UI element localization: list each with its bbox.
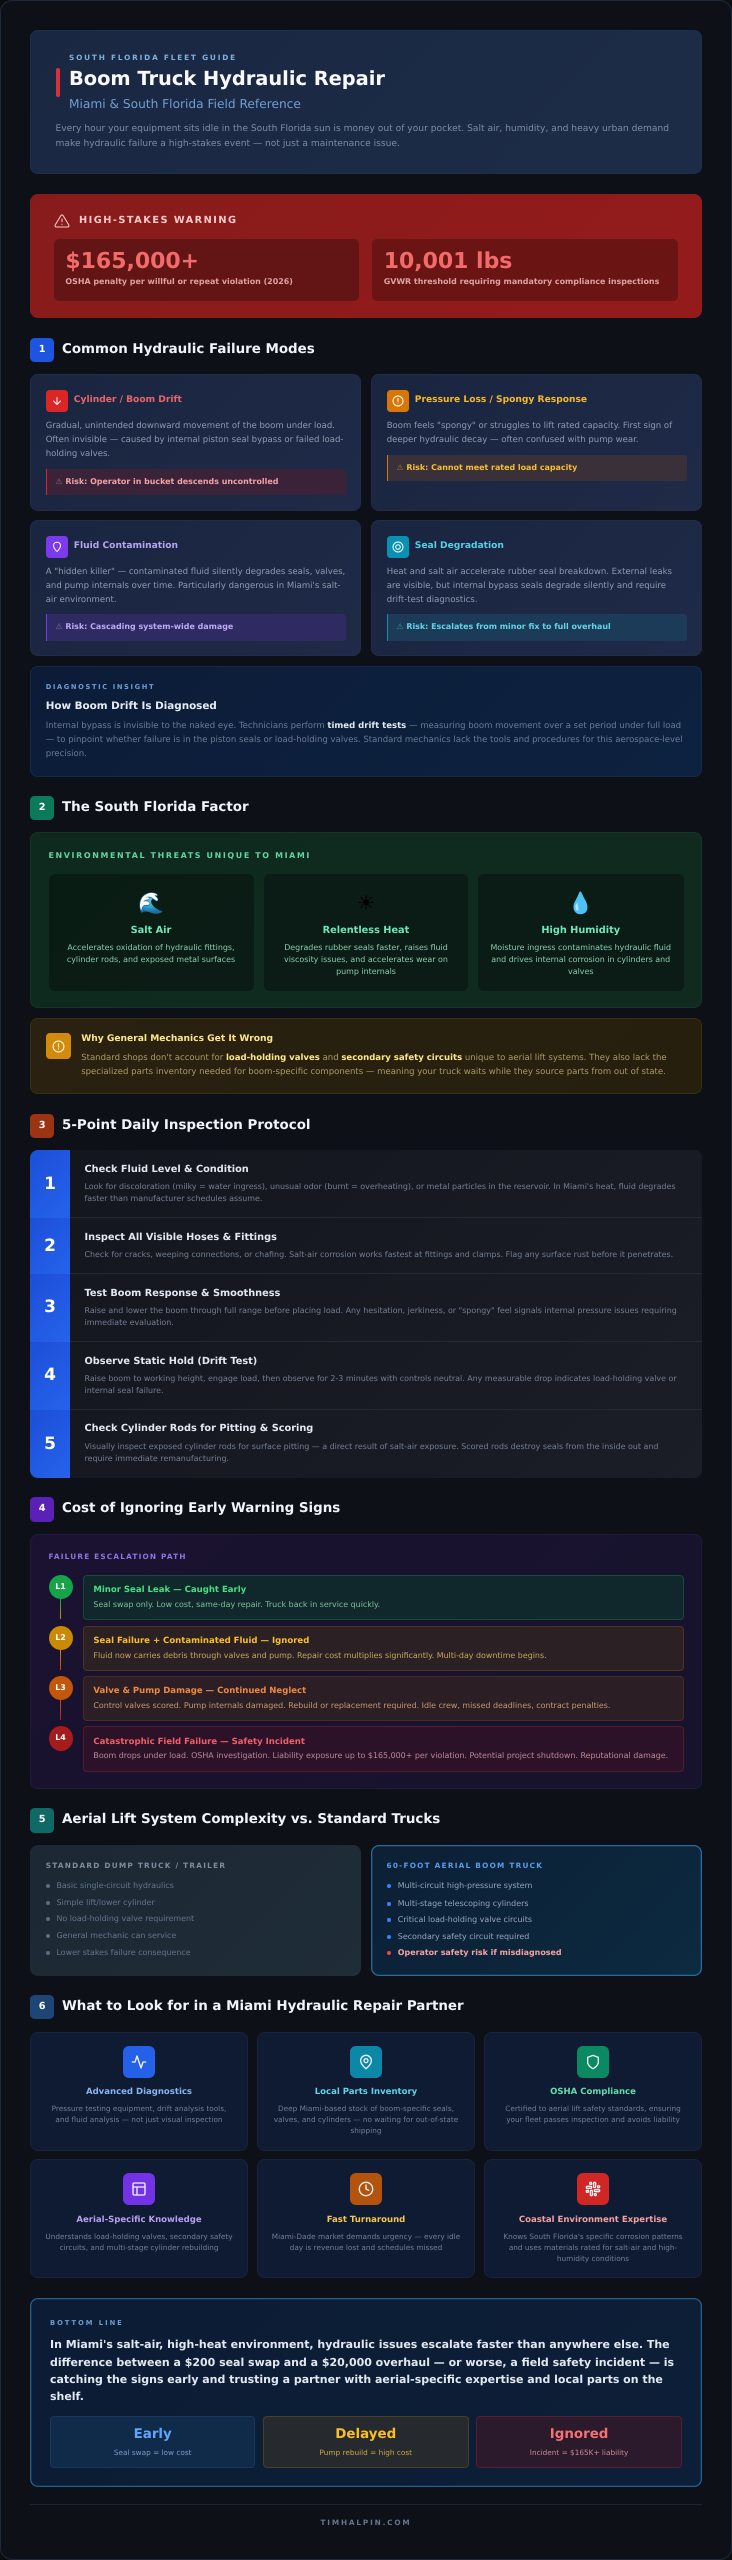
icon: slack xyxy=(577,2173,609,2205)
stat caption: OSHA penalty per willful or repeat violation (2026) xyxy=(65,277,293,286)
summary text: shelf. xyxy=(50,2390,84,2403)
card text: Gradual, unintended downward movement of the boom under load. xyxy=(46,421,335,431)
heading: section 1 xyxy=(30,338,315,362)
step 1 xyxy=(30,1150,702,1218)
card text: valves, and cylinders — no waiting for out-of-state xyxy=(274,2115,458,2124)
card title: Coastal Environment Expertise xyxy=(519,2214,667,2224)
card: advanced diagnostics xyxy=(30,2032,248,2151)
stat: GVWR threshold xyxy=(372,239,678,301)
icon: droplet xyxy=(46,536,68,558)
threat text xyxy=(67,943,235,964)
level text: Fluid now carries debris through valves and pump. Repair cost multiplies significantly. Multi-day downtime begins. xyxy=(93,1651,547,1660)
callout title: Why General Mechanics Get It Wrong xyxy=(81,1034,273,1044)
step text: Raise and lower the boom through full range before placing load. Any hesitation, jerkiness, or "spongy" feel signals internal pressure issues requiring xyxy=(84,1306,677,1315)
card text: holding valves. xyxy=(46,449,110,459)
threat text: Accelerates oxidation of hydraulic fittings, xyxy=(67,943,235,952)
number xyxy=(30,1218,70,1274)
threat title: Salt Air xyxy=(131,925,171,936)
kicker: SOUTH FLORIDA FLEET GUIDE xyxy=(69,53,237,62)
badge: 5 xyxy=(39,1814,46,1825)
card text xyxy=(484,2231,702,2264)
marker xyxy=(48,1726,72,1751)
card title: Seal Degradation xyxy=(415,541,504,551)
risk callout: ⚠ Risk: Operator in bucket descends uncontrolled xyxy=(55,477,278,486)
card text xyxy=(30,2231,248,2253)
number: 1 xyxy=(44,1174,56,1194)
step text: require immediate remanufacturing. xyxy=(84,1454,229,1463)
icon: layout xyxy=(123,2173,155,2205)
threat text xyxy=(284,943,448,976)
badge xyxy=(30,338,54,362)
item: Secondary safety circuit required xyxy=(398,1932,529,1941)
card text xyxy=(46,421,344,459)
footer: TIMHALPIN.COM xyxy=(320,2518,412,2527)
card title: Advanced Diagnostics xyxy=(86,2087,192,2097)
risk callout: ⚠ Risk: Cannot meet rated load capacity xyxy=(396,463,577,472)
card text: your fleet passes inspection and avoids liability xyxy=(506,2115,680,2124)
label: BOTTOM LINE xyxy=(50,2319,124,2327)
item: Basic single-circuit hydraulics xyxy=(56,1881,174,1890)
card text: Understands load-holding valves, secondary safety xyxy=(45,2232,233,2241)
step text: Raise boom to working height, engage load, then observe for 2-3 minutes with controls neutral. Any measurable drop indicates load-holding valve or xyxy=(84,1374,677,1383)
title: Boom Truck Hydraulic Repair xyxy=(69,67,385,90)
card text: are visible, but internal bypass seals degrade silently and require xyxy=(387,581,666,591)
badge: 3 xyxy=(39,1120,46,1131)
marker: L3 xyxy=(55,1683,66,1692)
intro text: Every hour your equipment sits idle in the South Florida sun is money out of your pocket. Salt air, humidity, and heavy urban demand xyxy=(56,124,669,134)
card text: and fluid analysis — not just visual inspection xyxy=(55,2115,223,2124)
item: Multi-circuit high-pressure system xyxy=(398,1881,532,1890)
panel: header xyxy=(30,30,702,174)
item: General mechanic can service xyxy=(56,1931,176,1940)
section title: Common Hydraulic Failure Modes xyxy=(62,342,315,357)
section title: What to Look for in a Miami Hydraulic Repair Partner xyxy=(62,1999,464,2014)
card title: Cylinder / Boom Drift xyxy=(74,395,182,405)
section title: Cost of Ignoring Early Warning Signs xyxy=(62,1501,340,1516)
risk callout: ⚠ Risk: Escalates from minor fix to full overhaul xyxy=(396,622,611,631)
card title: OSHA Compliance xyxy=(550,2087,636,2097)
card text: circuits, and multi-stage cylinder rebuilding xyxy=(59,2243,219,2252)
card text xyxy=(484,2103,702,2125)
threat text: Degrades rubber seals faster, raises fluid xyxy=(284,943,448,952)
section title: The South Florida Factor xyxy=(62,800,249,815)
subtitle: Miami & South Florida Field Reference xyxy=(69,97,301,111)
number xyxy=(30,1342,70,1410)
step text xyxy=(84,1306,677,1327)
number: 4 xyxy=(44,1365,56,1385)
body xyxy=(46,721,683,759)
number xyxy=(30,1274,70,1342)
icon: sun: ☀ xyxy=(357,891,375,915)
callout text xyxy=(81,1053,667,1077)
level title: Minor Seal Leak — Caught Early xyxy=(93,1585,246,1595)
number xyxy=(30,1150,70,1218)
card title: Fast Turnaround xyxy=(327,2214,405,2224)
icon: wave: 🌊 xyxy=(138,891,164,915)
card text xyxy=(387,567,672,605)
stat number: $165,000+ xyxy=(65,249,199,274)
panel: failure escalation path xyxy=(30,1534,702,1789)
level text: Control valves scored. Pump internals damaged. Rebuild or replacement required. Idle crew, missed deadlines, contract penalties. xyxy=(93,1701,610,1710)
number: 2 xyxy=(44,1236,56,1256)
card text: and pump internals over time. Particularly dangerous in Miami's salt- xyxy=(46,581,340,591)
label: 60-FOOT AERIAL BOOM TRUCK xyxy=(386,1861,543,1870)
level text: Boom drops under load. OSHA investigation. Liability exposure up to $165,000+ per violation. Potential project shutdown. Reputational damage. xyxy=(93,1751,668,1760)
number: 5 xyxy=(44,1434,56,1454)
stat caption: GVWR threshold requiring mandatory compliance inspections xyxy=(384,277,659,286)
step 3 xyxy=(30,1274,702,1342)
description xyxy=(83,1676,684,1721)
summary text xyxy=(50,2336,674,2406)
badge: 2 xyxy=(39,802,46,813)
description xyxy=(83,1726,684,1772)
body: precision. xyxy=(46,749,87,759)
step text xyxy=(84,1374,677,1395)
section title: 5-Point Daily Inspection Protocol xyxy=(62,1118,311,1133)
card text: Miami-Dade market demands urgency — every idle xyxy=(272,2232,460,2241)
list xyxy=(387,1881,562,1957)
step title: Observe Static Hold (Drift Test) xyxy=(84,1356,257,1367)
label: FAILURE ESCALATION PATH xyxy=(48,1552,187,1561)
heading: section 3 xyxy=(30,1114,311,1138)
threat text: Moisture ingress contaminates hydraulic fluid xyxy=(490,943,671,952)
card text: Often invisible — caused by internal piston seal bypass or failed load- xyxy=(46,435,343,445)
card: seal degradation xyxy=(371,520,702,656)
card text: Knows South Florida's specific corrosion patterns xyxy=(503,2232,683,2241)
risk callout xyxy=(46,614,346,641)
card text: and uses materials rated for salt-air and high- xyxy=(509,2243,677,2252)
number xyxy=(30,1410,70,1478)
summary text: In Miami's salt-air, high-heat environment, hydraulic issues escalate faster than anywhere else. The xyxy=(50,2338,670,2351)
heading: How Boom Drift Is Diagnosed xyxy=(46,700,217,712)
card text: drift-test diagnostics. xyxy=(387,595,477,605)
step 2 xyxy=(30,1218,702,1274)
intro text xyxy=(56,124,669,149)
panel: standard dump truck xyxy=(30,1845,361,1976)
panel: diagnostic insight xyxy=(30,666,702,777)
icon: alert circle xyxy=(387,390,409,412)
step title: Test Boom Response & Smoothness xyxy=(84,1288,280,1299)
step text: faster than manufacturer schedules assume. xyxy=(84,1194,262,1203)
card: OSHA compliance xyxy=(484,2032,702,2151)
step text: Visually inspect exposed cylinder rods for surface pitting — a direct result of salt-air exposure. Scored rods destroy seals from the inside out and xyxy=(84,1442,658,1451)
badge xyxy=(30,1497,54,1522)
connector xyxy=(60,1599,61,1619)
step 4 xyxy=(30,1342,702,1410)
level 2 xyxy=(49,1626,684,1671)
heading: section 4 xyxy=(30,1497,340,1522)
badge xyxy=(30,1995,54,2019)
heading: section 6 xyxy=(30,1995,464,2019)
icon: shield xyxy=(577,2046,609,2078)
panel: inspection protocol xyxy=(30,1150,702,1478)
note: Pump rebuild = high cost xyxy=(319,2448,412,2457)
badge: 4 xyxy=(39,1503,46,1514)
summary text: difference between a $200 seal swap and a $20,000 overhaul — or worse, a field safety incident — is xyxy=(50,2356,674,2369)
heading: section 5 xyxy=(30,1808,440,1833)
threat: salt air xyxy=(48,874,254,991)
body: — to pinpoint whether failure is in the piston seals or load-holding valves. Standard mechanics lack the tools and procedures for this aerospace-level xyxy=(46,735,683,745)
card text: Boom feels "spongy" or struggles to lift rated capacity. First sign of xyxy=(387,421,672,431)
card text: Pressure testing equipment, drift analysis tools, xyxy=(52,2104,226,2113)
body: Internal bypass is invisible to the naked eye. Technicians perform timed drift tests — measuring boom movement over a set period under full load xyxy=(46,721,681,731)
outcome: delayed xyxy=(263,2416,469,2468)
note: Seal swap = low cost xyxy=(114,2448,192,2457)
outcome: early xyxy=(50,2416,255,2468)
marker xyxy=(48,1575,72,1599)
item: Lower stakes failure consequence xyxy=(56,1948,191,1957)
description xyxy=(83,1575,684,1620)
icon: target xyxy=(387,536,409,558)
card: fast turnaround xyxy=(257,2159,475,2278)
level text: Seal swap only. Low cost, same-day repair. Truck back in service quickly. xyxy=(93,1600,380,1609)
item: Critical load-holding valve circuits xyxy=(398,1915,532,1924)
label: ENVIRONMENTAL THREATS UNIQUE TO MIAMI xyxy=(48,851,311,860)
threat text: viscosity issues, and accelerates wear on xyxy=(284,955,448,964)
word: Early xyxy=(134,2427,172,2442)
level title: Seal Failure + Contaminated Fluid — Ignored xyxy=(93,1636,309,1646)
stat: OSHA penalty xyxy=(54,239,359,301)
threat: humidity xyxy=(478,874,684,991)
badge xyxy=(30,1114,54,1138)
badge: 6 xyxy=(39,2001,46,2012)
card text: deeper hydraulic decay — often confused with pump wear. xyxy=(387,435,639,445)
badge xyxy=(30,796,54,820)
threat text xyxy=(490,943,671,976)
threat title: High Humidity xyxy=(541,925,620,936)
level 3 xyxy=(49,1676,684,1721)
risk callout xyxy=(387,614,687,641)
card: coastal environment expertise xyxy=(484,2159,702,2278)
card title: Local Parts Inventory xyxy=(315,2087,417,2097)
level title: Catastrophic Field Failure — Safety Incident xyxy=(93,1737,305,1747)
threat text: cylinder rods, and exposed metal surfaces xyxy=(67,955,235,964)
card text xyxy=(257,2231,475,2253)
step text: internal seal failure. xyxy=(84,1386,164,1395)
threat: heat xyxy=(264,874,468,991)
card text: Deep Miami-based stock of boom-specific seals, xyxy=(278,2104,454,2113)
level 4 xyxy=(49,1726,684,1772)
level 1 xyxy=(49,1575,684,1620)
risk callout: ⚠ Risk: Cascading system-wide damage xyxy=(55,622,233,631)
step text: Check for cracks, weeping connections, or chafing. Salt-air corrosion works fastest at fittings and clamps. Flag any surface rust before it penetrates. xyxy=(84,1250,673,1259)
description xyxy=(83,1626,684,1671)
panel: general mechanics callout xyxy=(30,1018,702,1094)
icon: clock xyxy=(350,2173,382,2205)
step title: Check Cylinder Rods for Pitting & Scoring xyxy=(84,1423,313,1434)
card title: Pressure Loss / Spongy Response xyxy=(415,395,587,405)
threat text: valves xyxy=(568,967,593,976)
label: DIAGNOSTIC INSIGHT xyxy=(46,683,155,691)
panel: aerial boom truck xyxy=(371,1845,702,1976)
card: fluid contamination xyxy=(30,520,361,656)
stat number: 10,001 lbs xyxy=(384,249,512,274)
step text: immediate evaluation. xyxy=(84,1318,174,1327)
card title: Fluid Contamination xyxy=(74,541,178,551)
card text: Certified to aerial lift safety standards, ensuring xyxy=(505,2104,681,2113)
risk callout xyxy=(387,455,687,481)
card text xyxy=(46,567,345,605)
card: cylinder boom drift xyxy=(30,374,361,511)
marker: L4 xyxy=(55,1733,66,1742)
threat title: Relentless Heat xyxy=(323,925,409,936)
step text: Look for discoloration (milky = water ingress), unusual odor (burnt = overheating), or metal particles in the reservoir. In Miami's heat, fluid degrades xyxy=(84,1182,675,1191)
word: Ignored xyxy=(550,2427,608,2442)
number: 3 xyxy=(44,1297,56,1317)
accent bar xyxy=(56,68,60,97)
marker xyxy=(48,1676,72,1700)
card text: day is revenue lost and schedules missed xyxy=(290,2243,442,2252)
callout text: Standard shops don't account for load-holding valves and secondary safety circuits unique to aerial lift systems. They also lack the xyxy=(81,1053,667,1063)
panel: bottom line xyxy=(30,2298,702,2487)
item: Multi-stage telescoping cylinders xyxy=(398,1899,528,1908)
step text xyxy=(84,1182,676,1203)
icon: map pin xyxy=(350,2046,382,2078)
card text: air environment. xyxy=(46,595,117,605)
badge: 1 xyxy=(39,344,46,355)
heading: section 2 xyxy=(30,796,249,820)
card text: humidity conditions xyxy=(557,2254,629,2263)
panel: environmental threats xyxy=(30,832,702,1008)
marker: L2 xyxy=(55,1633,66,1642)
marker xyxy=(48,1626,72,1650)
item: No load-holding valve requirement xyxy=(56,1914,194,1923)
icon: droplet: 💧 xyxy=(568,891,594,915)
warning label: HIGH-STAKES WARNING xyxy=(79,215,238,226)
card title: Aerial-Specific Knowledge xyxy=(76,2214,202,2224)
callout text: specialized parts inventory needed for boom-specific components — meaning your truck waits while they source parts from out of state. xyxy=(81,1067,666,1077)
list xyxy=(46,1881,194,1957)
word: Delayed xyxy=(335,2427,396,2442)
threat text: and drives internal corrosion in cylinders and xyxy=(491,955,670,964)
icon: down arrow xyxy=(46,390,68,412)
icon: warning triangle xyxy=(54,214,70,228)
section title: Aerial Lift System Complexity vs. Standard Trucks xyxy=(62,1812,440,1827)
panel: high-stakes warning xyxy=(30,194,702,318)
card text: shipping xyxy=(350,2126,382,2135)
icon: activity xyxy=(123,2046,155,2078)
icon: alert xyxy=(46,1033,71,1059)
item: Operator safety risk if misdiagnosed xyxy=(398,1948,562,1957)
card: pressure loss xyxy=(371,374,702,511)
note: Incident = $165K+ liability xyxy=(530,2448,628,2457)
badge xyxy=(30,1808,54,1833)
step text xyxy=(84,1442,658,1463)
step 5 xyxy=(30,1410,658,1478)
card: aerial-specific knowledge xyxy=(30,2159,248,2278)
card text: Heat and salt air accelerate rubber seal breakdown. External leaks xyxy=(387,567,672,577)
card text xyxy=(387,421,672,445)
card text: A "hidden killer" — contaminated fluid silently degrades seals, valves, xyxy=(46,567,345,577)
step title: Check Fluid Level & Condition xyxy=(84,1164,249,1175)
card text xyxy=(274,2104,458,2135)
marker: L1 xyxy=(55,1582,66,1591)
level title: Valve & Pump Damage — Continued Neglect xyxy=(93,1686,306,1696)
item: Simple lift/lower cylinder xyxy=(56,1898,155,1907)
card text xyxy=(52,2104,226,2124)
risk callout xyxy=(46,469,346,495)
summary text: catching the signs early and trusting a partner with aerial-specific expertise and local parts on the xyxy=(50,2373,663,2386)
intro text: make hydraulic failure a high-stakes event — not just a maintenance issue. xyxy=(56,139,400,149)
outcome: ignored xyxy=(476,2416,682,2468)
card: local parts inventory xyxy=(257,2032,475,2151)
connector xyxy=(60,1650,61,1670)
connector xyxy=(60,1700,61,1720)
label: STANDARD DUMP TRUCK / TRAILER xyxy=(46,1861,226,1870)
step title: Inspect All Visible Hoses & Fittings xyxy=(84,1232,277,1243)
threat text: pump internals xyxy=(336,967,396,976)
